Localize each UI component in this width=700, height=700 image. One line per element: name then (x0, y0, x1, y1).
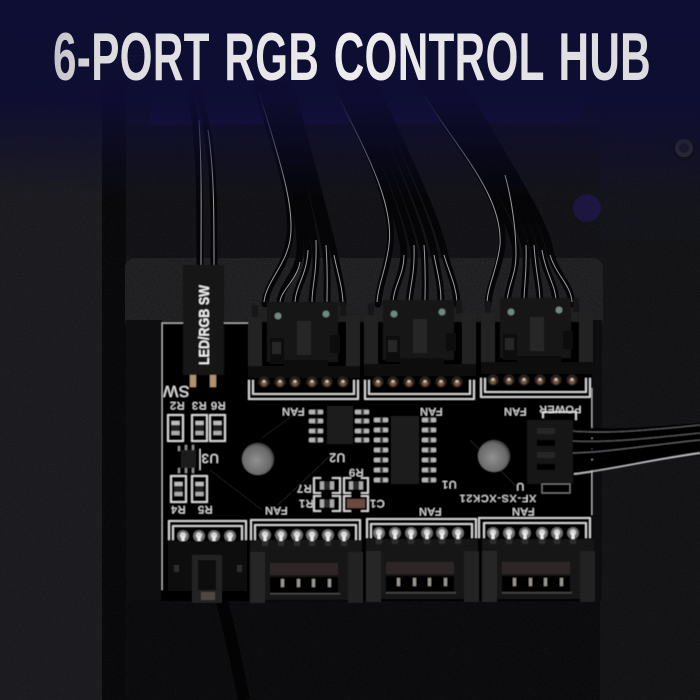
silkscreen labels, center and right: C1 (369, 497, 385, 509)
purple reflection spot (573, 194, 601, 222)
top fade overlay (0, 0, 700, 200)
LED/RGB SW connector: LED/RGB SW (196, 284, 213, 365)
fan cable bundle 3 (420, 80, 572, 304)
fan cable bundle 2 (337, 80, 457, 304)
silkscreen labels, left component group: SW (162, 382, 189, 399)
silkscreen labels, center and right: R1 (298, 497, 314, 509)
power cables (572, 425, 700, 474)
silkscreen labels, left component group: U3 (201, 451, 219, 466)
bottom cable (222, 602, 244, 700)
silkscreen labels, left component group: R2 (169, 399, 185, 411)
silkscreen labels, center and right: U2 (329, 450, 345, 464)
silkscreen labels, center and right: POWER (539, 403, 581, 415)
icon: case screw (671, 135, 697, 161)
resistor footprints, left group (168, 415, 225, 502)
silkscreen labels, center and right: FAN (264, 504, 288, 516)
board outline silk (162, 323, 592, 590)
LED/RGB SW connector (183, 265, 224, 387)
fan cable bundle 1 (256, 85, 343, 304)
silkscreen labels, left component group: R6 (210, 399, 226, 411)
silkscreen labels, left component group: R5 (197, 503, 213, 515)
silkscreen labels, left component group (162, 382, 226, 515)
bottom fan header 1 (250, 520, 363, 603)
center resistor footprints (314, 478, 368, 511)
silkscreen labels, center and right: R7 (296, 482, 312, 494)
top fan connector 2 (364, 300, 476, 388)
silkscreen labels, left component group: R4 (170, 503, 186, 515)
bottom fan header 2 (366, 519, 479, 602)
silkscreen labels, center and right: U (516, 480, 524, 492)
mounting hole left (242, 443, 274, 475)
silkscreen labels, center and right: U1 (441, 478, 457, 490)
U3 chip footprint (179, 445, 200, 473)
bottom fan header 3 (479, 518, 595, 602)
top fan connector 1 (248, 302, 360, 388)
bottom 4-pin header (168, 521, 247, 603)
LED/RGB switch cable (190, 88, 214, 268)
silkscreen labels, left component group: R3 (191, 399, 207, 411)
circuit board (161, 265, 700, 603)
silkscreen labels, center and right: XF-XS-XCK21 (459, 492, 536, 504)
case panel cutout with purple glow (150, 80, 585, 125)
silkscreen labels, center and right: FAN (419, 405, 443, 417)
silkscreen labels, center and right: R9 (348, 466, 364, 478)
top fan header outlines (249, 378, 590, 399)
U2 chip (309, 406, 369, 444)
silkscreen labels, center and right: FAN (511, 505, 535, 517)
silkscreen labels, center and right (264, 403, 581, 517)
silkscreen labels, center and right: FAN (281, 405, 305, 417)
power connector (527, 412, 576, 493)
U1 main chip (374, 416, 436, 484)
mounting hole right (478, 440, 510, 472)
silkscreen labels, center and right: FAN (418, 505, 442, 517)
diagonal traces (210, 410, 520, 510)
top fan connector 3 (481, 298, 593, 386)
mounting tray behind board (125, 258, 603, 600)
silkscreen labels, center and right: FAN (503, 405, 527, 417)
